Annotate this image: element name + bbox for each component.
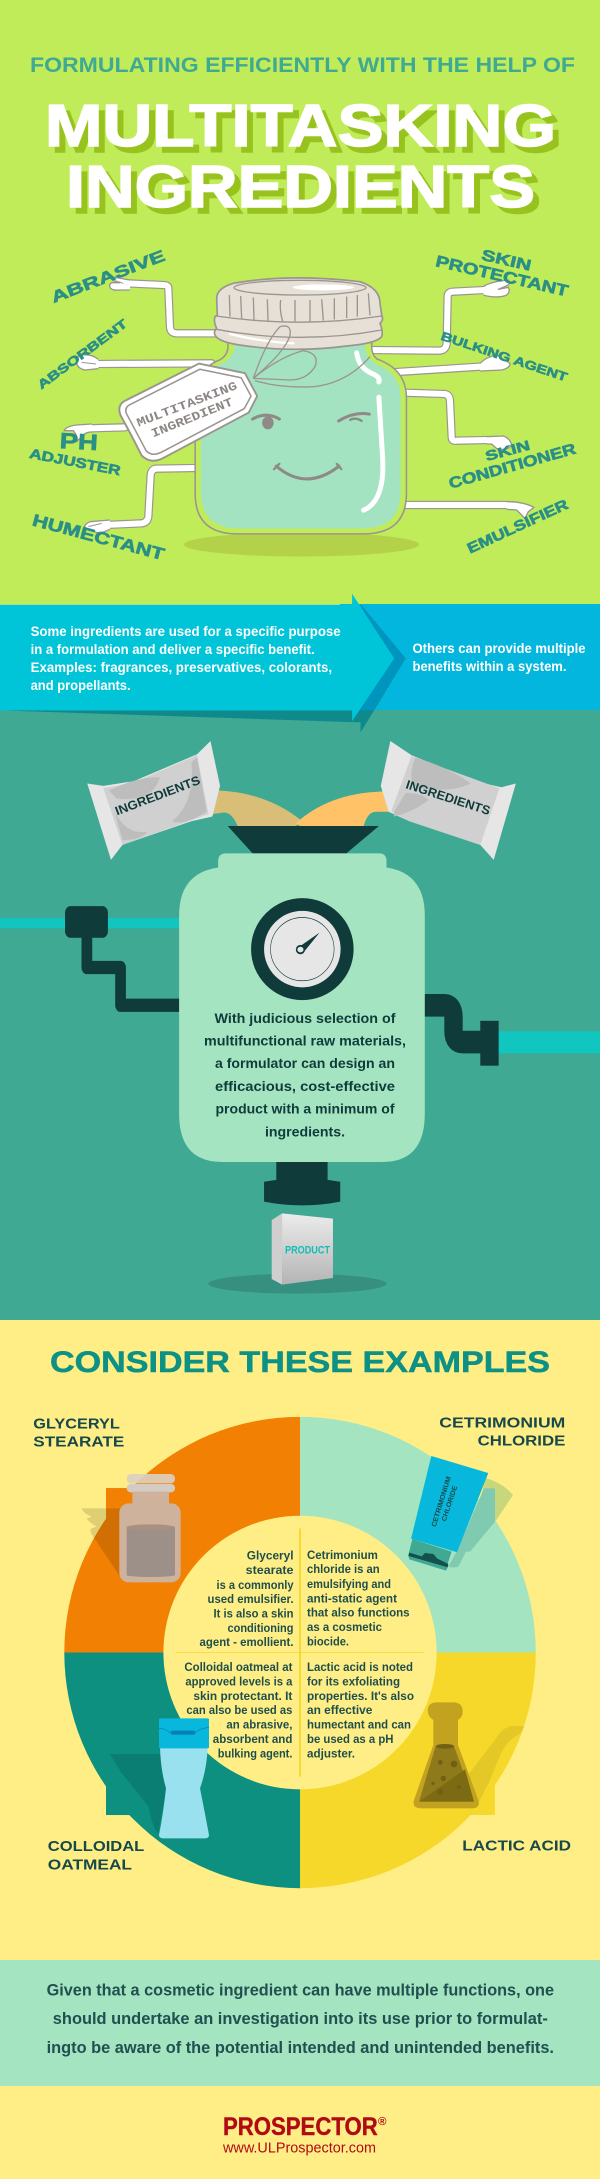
arm labels: ADJUSTER (28, 446, 122, 478)
text: glyceryl stearate: is a commonly (216, 1580, 294, 1592)
text: lactic acid: be used as a pH (307, 1734, 394, 1746)
machine illustration (0, 741, 600, 1294)
gauge (251, 898, 354, 1000)
funnel (228, 826, 379, 853)
left statement (31, 624, 341, 693)
title: INGREDIENTS (66, 154, 535, 220)
product box (272, 1213, 333, 1285)
arm labels: HUMECTANT (30, 511, 167, 564)
tag: INGREDIENT (149, 396, 235, 441)
conclusion text: should undertake an investigation into its use prior to formulat- (53, 2009, 548, 2028)
tag (119, 364, 257, 461)
examples heading: CONSIDER THESE EXAMPLES (50, 1346, 550, 1379)
text: colloidal oatmeal (184, 1662, 293, 1761)
title: MULTITASKING (51, 99, 562, 165)
panel: conclusion band (0, 1960, 600, 2086)
label: glyceryl stearate: GLYCERYL (33, 1416, 120, 1433)
jar lid (214, 278, 383, 387)
left statement: and propellants. (31, 678, 131, 693)
pipes (0, 906, 600, 1066)
donut chart (64, 1417, 536, 1888)
right statement: Others can provide multiple (412, 641, 586, 656)
arrow shadow (0, 594, 406, 733)
text: colloidal oatmeal: approved levels is a (185, 1677, 293, 1689)
label: colloidal oatmeal: COLLOIDAL (48, 1838, 144, 1855)
bottle cast shadow (110, 1754, 167, 1833)
label: cetrimonium chloride: CHLORIDE (478, 1432, 565, 1449)
text: lactic acid: humectant and can (307, 1719, 411, 1731)
panel: machine background (0, 710, 600, 1320)
right statement: benefits within a system. (412, 659, 566, 674)
arm labels: PH (59, 428, 99, 455)
output spout (264, 1162, 340, 1205)
panel: footer background (0, 2086, 600, 2179)
jar shadow (184, 532, 419, 556)
icon: jar (119, 1474, 181, 1582)
text: lactic acid: for its exfoliating (307, 1677, 400, 1689)
text: cetrimonium chloride: emulsifying and (307, 1579, 391, 1591)
packet label right: INGREDIENTS (404, 778, 492, 818)
text: colloidal oatmeal: skin protectant. It (193, 1691, 293, 1703)
machine text: a formulator can design an (215, 1055, 395, 1071)
text: glyceryl stearate: stearate (246, 1565, 294, 1577)
packet label left: INGREDIENTS (113, 773, 202, 818)
title (45, 93, 562, 226)
machine text (204, 1010, 406, 1140)
icon: flask (414, 1702, 479, 1808)
arm labels: SKIN (480, 247, 533, 275)
flask cast shadow (467, 1726, 524, 1803)
text: glyceryl stearate: conditioning (228, 1623, 294, 1635)
bow string (253, 326, 370, 387)
machine shapes (0, 741, 600, 1294)
text: glyceryl stearate: agent - emollient. (200, 1637, 294, 1649)
subtitle: FORMULATING EFFICIENTLY WITH THE HELP OF (30, 54, 575, 77)
label: cetrimonium chloride (439, 1414, 565, 1449)
arm labels: ABRASIVE (49, 247, 168, 307)
face (253, 413, 369, 479)
machine text: With judicious selection of (214, 1010, 396, 1026)
arm labels: SKIN (484, 438, 532, 464)
jar contents (201, 344, 401, 529)
text: glyceryl stearate: used emulsifier. (208, 1594, 294, 1606)
left statement: in a formulation and deliver a specific benefit. (31, 642, 315, 657)
text: glyceryl stearate: It is also a skin (214, 1608, 294, 1620)
conclusion text (47, 1980, 554, 2057)
center disc and dividers (163, 1516, 437, 1789)
panel: header background (0, 0, 600, 604)
text: cetrimonium chloride: that also functions (307, 1608, 410, 1620)
jar highlights (357, 353, 383, 510)
label: glyceryl stearate (33, 1416, 124, 1450)
text: cetrimonium chloride: anti-static agent (307, 1594, 397, 1606)
jar body (195, 343, 406, 534)
arm labels: ABSORBENT (35, 316, 130, 392)
text: colloidal oatmeal: an abrasive, (226, 1719, 292, 1731)
machine text: efficacious, cost-effective (215, 1078, 395, 1094)
logo: Prospector: ® (378, 2116, 386, 2128)
text: colloidal oatmeal: can also be used as (186, 1705, 292, 1717)
product label: PRODUCT (285, 1244, 330, 1256)
text: cetrimonium chloride: chloride is an (307, 1564, 380, 1576)
label: cetrimonium chloride: CETRIMONIUM (439, 1414, 565, 1432)
title: MULTITASKING (45, 93, 556, 159)
text: cetrimonium chloride: as a cosmetic (307, 1622, 383, 1634)
tube label: CETRIMONIUM (431, 1476, 453, 1528)
label: glyceryl stearate: STEARATE (33, 1434, 124, 1450)
arm labels: BULKING AGENT (439, 329, 570, 385)
text: lactic acid: an effective (307, 1705, 372, 1717)
logo: Prospector: PROSPECTOR (223, 2113, 378, 2141)
tube label: CHLORIDE (441, 1485, 459, 1522)
left statement: Some ingredients are used for a specific purpose (31, 624, 341, 639)
arm labels (28, 247, 578, 564)
text: lactic acid: properties. It's also (307, 1691, 414, 1703)
icon: bottle (159, 1718, 209, 1838)
left arms (64, 277, 217, 533)
title: INGREDIENTS (72, 160, 541, 226)
arm labels: EMULSIFIER (465, 497, 572, 557)
machine text: multifunctional raw materials, (204, 1032, 406, 1048)
conclusion text: ingto be aware of the potential intended and unintended benefits. (47, 2038, 554, 2057)
machine text: ingredients. (265, 1124, 345, 1140)
left statement: Examples: fragrances, preservatives, colorants, (31, 660, 332, 675)
text: colloidal oatmeal: bulking agent. (218, 1749, 292, 1761)
text: lactic acid: Lactic acid is noted (307, 1662, 413, 1674)
panel: examples background (0, 1320, 600, 1960)
product shadow (208, 1274, 387, 1294)
label: lactic acid: LACTIC ACID (462, 1838, 571, 1855)
text: cetrimonium chloride (307, 1550, 410, 1648)
text: glyceryl stearate (200, 1551, 294, 1649)
icon: tube (408, 1457, 488, 1571)
tag: MULTITASKING (135, 379, 239, 430)
jar illustration with labelled arms (28, 247, 578, 564)
corner tabs (106, 1488, 152, 1520)
logo: Prospector (222, 2113, 386, 2157)
text: lactic acid: adjuster. (307, 1749, 355, 1761)
arm labels: PROTECTANT (434, 252, 570, 300)
right arms (370, 280, 534, 518)
machine text: product with a minimum of (216, 1100, 395, 1116)
jar cast shadow (82, 1508, 132, 1580)
tube background shadow (480, 1478, 513, 1522)
arm labels: CONDITIONER (447, 441, 578, 493)
text: glyceryl stearate: Glyceryl (247, 1551, 294, 1563)
left packet (87, 741, 220, 860)
machine body (179, 853, 425, 1162)
text: colloidal oatmeal: Colloidal oatmeal at (184, 1662, 293, 1674)
logo: Prospector: www.ULProspector.com (222, 2140, 376, 2157)
right band (340, 604, 600, 710)
right packet (381, 741, 516, 860)
tube cast shadow (448, 1488, 495, 1567)
label: colloidal oatmeal (48, 1838, 144, 1874)
donut shapes (64, 1417, 536, 1888)
right statement (412, 641, 586, 674)
text: cetrimonium chloride: biocide. (307, 1636, 349, 1648)
panel: comparison band (0, 594, 600, 733)
text: cetrimonium chloride: Cetrimonium (307, 1550, 378, 1562)
quadrants (64, 1417, 300, 1653)
ingredient streams (212, 791, 388, 827)
label: colloidal oatmeal: OATMEAL (48, 1857, 132, 1874)
text: lactic acid (307, 1662, 414, 1761)
conclusion text: Given that a cosmetic ingredient can have multiple functions, one (47, 1980, 554, 1999)
text: colloidal oatmeal: absorbent and (213, 1734, 292, 1746)
